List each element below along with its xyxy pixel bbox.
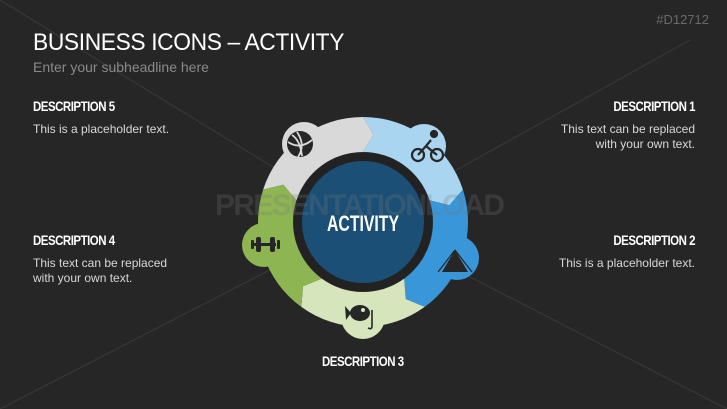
subheadline: Enter your subheadline here (33, 59, 209, 75)
text 2: This is a placeholder text. (559, 256, 695, 270)
segment: basketball (263, 117, 374, 200)
heading 1: DESCRIPTION 1 (613, 98, 695, 114)
segment: camping (404, 190, 479, 307)
icon: fish (345, 305, 372, 329)
segment: fishing (301, 279, 425, 339)
segment: fitness (242, 185, 322, 307)
description 1 (561, 98, 696, 151)
icon: basketball (287, 131, 313, 157)
description 2 (559, 232, 696, 270)
segment: cycling (363, 117, 463, 205)
text 1: with your own text. (596, 137, 695, 151)
title: BUSINESS ICONS – ACTIVITY (33, 29, 344, 56)
heading 4: DESCRIPTION 4 (33, 232, 115, 248)
icon: dumbbell (251, 237, 280, 252)
icon: cyclist (412, 131, 443, 161)
watermark: PRESENTATIONLOAD (215, 189, 505, 222)
text 4: This text can be replaced (33, 256, 167, 270)
center circle (302, 161, 424, 283)
text 1: This text can be replaced (561, 122, 695, 136)
icon: tent (438, 250, 472, 272)
center label: ACTIVITY (327, 211, 399, 236)
description 4 (33, 232, 167, 285)
text 4: with your own text. (33, 271, 132, 285)
heading 2: DESCRIPTION 2 (613, 232, 695, 248)
text 5: This is a placeholder text. (33, 122, 169, 136)
center ring (294, 153, 432, 291)
text 1 (561, 122, 695, 151)
text 4 (33, 256, 167, 285)
description 3: DESCRIPTION 3 (322, 353, 404, 369)
description 5 (33, 98, 169, 136)
code label: #D12712 (656, 12, 709, 27)
heading 5: DESCRIPTION 5 (33, 98, 115, 114)
